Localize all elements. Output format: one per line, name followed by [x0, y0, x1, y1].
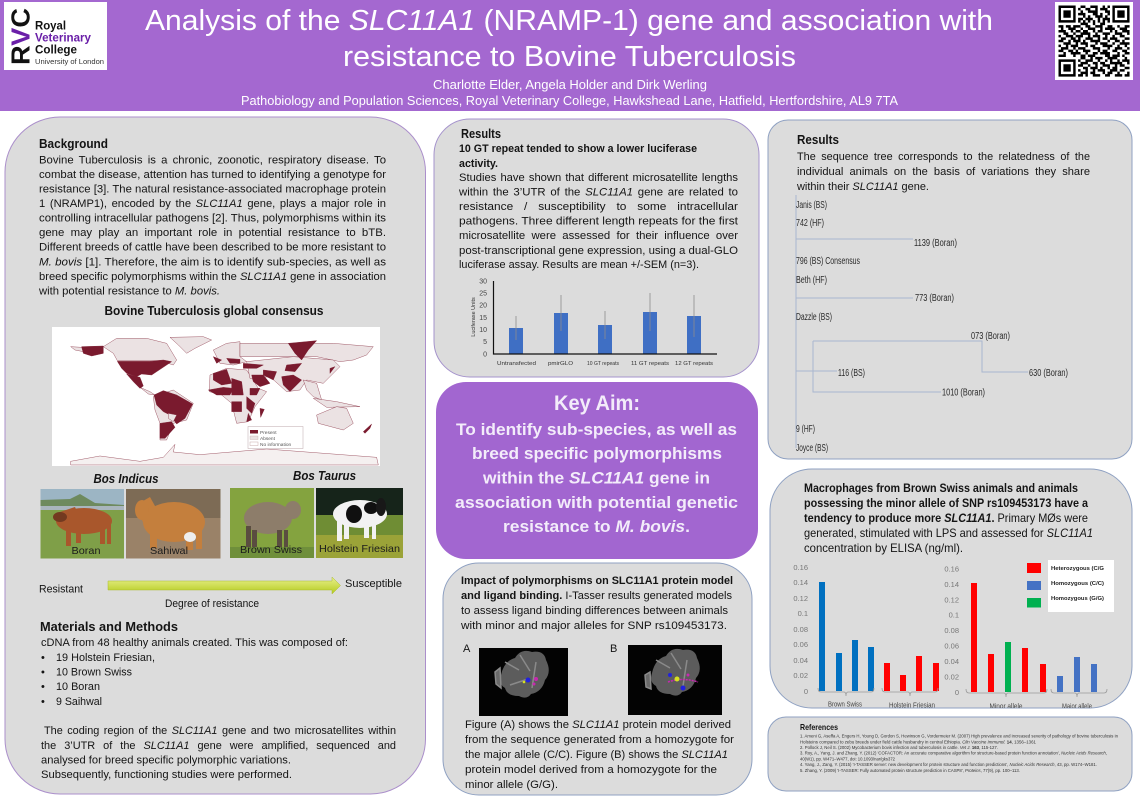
- title: resistance to Bovine Tuberculosis: [343, 41, 796, 73]
- photo: Boran: [40, 489, 124, 559]
- map legend: Absent: [260, 436, 276, 442]
- text block: methods: analysed for breed specific polymorphic variations.: [41, 754, 291, 766]
- photo captions: Brown Swiss: [240, 544, 302, 556]
- figure B: protein model, minor allele: [628, 645, 722, 715]
- subheading: luciferase finding: 10 GT repeat tended to show a lower luciferase: [459, 143, 697, 155]
- logo: Royal Veterinary College: College: [35, 44, 77, 56]
- panel: key aim: [436, 382, 758, 559]
- bar chart: by allele: 0.04: [944, 657, 959, 666]
- subheading: luciferase finding: [459, 143, 697, 170]
- text block: references list: 2. Pollock J, Neil S. (2002) Mycobacterium bovis infection and tuberculosis in cattle. Vet J. 163, 115-127.: [800, 745, 998, 751]
- bar chart: luciferase units: 10 GT repeats: [587, 361, 619, 367]
- text block: protein model intro: and ligand binding. I-Tasser results generated models: [461, 590, 732, 602]
- bar chart: by breed: 0: [804, 687, 808, 696]
- sequence tree: 796 (BS) Consensus: [796, 256, 860, 267]
- text block: tree description: individual animals on the basis of variations they share: [797, 166, 1090, 178]
- bar chart: by breed: Brown Swiss: [828, 700, 862, 708]
- affiliation: Pathobiology and Population Sciences, Royal Veterinary College, Hawkshead Lane, Hatfield, Hertfordshire, AL9 7TA: [241, 93, 898, 108]
- photo captions: Boran: [72, 545, 101, 557]
- bar chart: by allele: 0.08: [944, 626, 959, 635]
- heading: key aim: Key Aim:: [554, 392, 640, 415]
- text block: luciferase description: resistance / susceptibility to some intracellular: [459, 201, 738, 213]
- text block: key aim: To identify sub-species, as well as: [456, 420, 737, 439]
- bar chart: by allele: 0: [955, 688, 959, 697]
- text block: background: breed specific polymorphisms within the SLC11A1 gene in association: [39, 271, 386, 283]
- label: susceptible: Susceptible: [345, 578, 402, 590]
- text block: methods: [41, 725, 396, 781]
- text block: materials list: •: [41, 666, 45, 678]
- bar chart: luciferase units: 25: [479, 290, 487, 298]
- text block: materials list: 19 Holstein Friesian,: [56, 652, 155, 664]
- photo captions: Holstein Friesian: [319, 543, 400, 555]
- panel: macrophage results: [770, 469, 1132, 710]
- map legend: [248, 426, 303, 448]
- sequence tree: Beth (HF): [796, 275, 827, 286]
- text block: key aim: association with potential genetic: [455, 493, 738, 512]
- heading: Bos Taurus: Bos Taurus: [293, 469, 356, 483]
- bar chart: by breed: 0.14: [793, 578, 808, 587]
- heading: global consensus: Bovine Tuberculosis global consensus: [104, 304, 324, 318]
- text block: methods: The coding region of the SLC11A1 gene and two microsatellites within: [44, 725, 396, 737]
- bar chart: by breed: 0.12: [793, 594, 808, 603]
- sequence tree: 073 (Boran): [971, 331, 1010, 342]
- bar chart: by allele: 0.14: [944, 580, 959, 589]
- text block: figure caption: from the sequence generated from a homozygote for: [465, 734, 734, 746]
- sequence tree: Dazzle (BS): [796, 312, 832, 323]
- bar chart: by breed: 0.02: [793, 671, 808, 680]
- label: resistant: Resistant: [39, 584, 83, 596]
- text block: references list: 40(W1), pp. W471–W477, doi: 10.1093/nar/gks372: [800, 756, 895, 762]
- text block: macrophage results: concentration by ELISA (ng/ml).: [804, 541, 963, 555]
- text block: materials list: •: [41, 696, 45, 708]
- photo captions: [72, 543, 400, 557]
- subheading: luciferase finding: activity.: [459, 158, 498, 170]
- bar chart: by breed: 0.16: [793, 563, 808, 572]
- text block: key aim: breed specific polymorphisms: [472, 444, 722, 463]
- heading: background: Background: [39, 137, 108, 151]
- bar chart: luciferase units: Untransfected: [497, 361, 536, 367]
- logo: Royal Veterinary College: RVC: [6, 8, 36, 65]
- bar chart: luciferase units: Luciferase Units: [471, 297, 477, 337]
- panel: protein model: [443, 563, 752, 795]
- bar chart: by breed: 0.04: [793, 656, 808, 665]
- arrow: degree of resistance: [108, 577, 340, 594]
- sequence tree: 1139 (Boran): [914, 238, 957, 249]
- heading: references: References: [800, 722, 838, 732]
- map legend: No information: [260, 442, 292, 448]
- bar chart: by allele: 0.12: [944, 596, 959, 604]
- world map: [52, 327, 380, 466]
- sequence tree: 116 (BS): [838, 368, 865, 379]
- logo: Royal Veterinary College: Veterinary: [35, 32, 92, 44]
- text block: luciferase description: pathogens. Three different length repeats for the first: [459, 216, 738, 228]
- text block: materials list: 10 Boran: [56, 681, 100, 693]
- text block: figure caption: protein model derived from a homozygote for the: [465, 764, 717, 776]
- sequence tree: 742 (HF): [796, 218, 824, 229]
- bar chart: by allele: 0.16: [944, 564, 959, 574]
- text block: macrophage results: [804, 481, 1093, 555]
- text block: figure caption: minor allele (G/G).: [465, 779, 558, 791]
- text block: macrophage results: tendency to produce more SLC11A1. Primary MØs were: [804, 511, 1088, 525]
- heading: materials and methods: Materials and Methods: [40, 620, 178, 634]
- text block: materials list: •: [41, 681, 45, 693]
- figure A: protein model, major allele: [479, 648, 568, 716]
- sequence tree: 9 (HF): [796, 424, 815, 435]
- bar chart: by breed: 0.1: [798, 609, 808, 618]
- text block: figure caption: Figure (A) shows the SLC11A1 protein model derived: [465, 719, 731, 731]
- bar chart: luciferase units: 30: [479, 278, 487, 286]
- panel: references: [768, 717, 1132, 791]
- bar chart: luciferase units: 15: [479, 315, 487, 322]
- heading: Bos Indicus: Bos Indicus: [94, 472, 159, 486]
- bar chart: luciferase units: 10: [479, 327, 487, 334]
- logo: Royal Veterinary College: University of London: [35, 57, 104, 66]
- text block: protein model intro: [460, 575, 733, 632]
- text block: materials list: •: [41, 652, 45, 664]
- bar chart: by breed: [793, 563, 939, 710]
- text block: luciferase description: [458, 172, 739, 271]
- text block: references list: 5. Zhang, Y. (2009) 'I-TASSER: Fully automated protein structure prediction in CASP8', Proteins, 77(9), pp. 100–113.: [800, 768, 1020, 774]
- text block: key aim: within the SLC11A1 gene in: [482, 468, 710, 488]
- bar chart: luciferase units: 0: [483, 352, 487, 358]
- bar chart: by allele: [944, 564, 1107, 710]
- text block: background: controlling intracellular pathogens [2]. Thus, polymorphisms within its: [39, 212, 387, 224]
- text block: background: gene may play an important role in potential resistance to bTB.: [39, 227, 386, 239]
- sequence tree: 773 (Boran): [915, 293, 954, 304]
- bar chart: luciferase units: [471, 278, 717, 367]
- bar chart: by breed: 0.06: [793, 640, 808, 649]
- text block: references list: Holsteins compared to zebu breeds under field cattle husbandry in central Ethiopia. Clin Vaccine Immunol. 14, 1356–1361: [800, 739, 1036, 745]
- sequence tree: Joyce (BS): [796, 443, 828, 454]
- text block: protein model intro: to assess ligand binding differences between animals: [461, 605, 729, 617]
- text block: luciferase description: Studies have shown that different microsatellite lengths: [459, 172, 739, 184]
- chart legend: [1027, 560, 1114, 612]
- text block: methods: Subsequently, functioning studies were performed.: [41, 769, 292, 781]
- text block: background: with potential resistance to M. bovis.: [38, 286, 220, 298]
- text block: luciferase description: within the 3’UTR of the SLC11A1 gene are related to: [458, 186, 738, 198]
- panel: background and methods: [5, 117, 426, 794]
- bar chart: by breed: Holstein Friesian: [889, 700, 935, 710]
- text block: protein model intro: with minor and major alleles for SNP rs109453173.: [460, 620, 727, 632]
- header banner: [0, 0, 1140, 111]
- text block: macrophage results: possessing the minor allele of SNP rs109453173 have a: [804, 496, 1088, 510]
- photo captions: Sahiwal: [150, 545, 188, 557]
- text block: materials list: [41, 637, 348, 708]
- text block: references list: [800, 734, 1118, 774]
- bar chart: luciferase units: 5: [483, 339, 487, 346]
- text block: luciferase description: microsatellite were assessed for their influence over: [459, 230, 738, 242]
- bar chart: luciferase units: 20: [479, 302, 487, 310]
- bar chart: by allele: Major allele: [1062, 702, 1092, 710]
- bar chart: by allele: 0.1: [949, 610, 959, 620]
- text block: background: Different breeds of cattle have been described to be more resistant to: [39, 242, 386, 254]
- text block: background: resistance [3]. The natural resistance-associated macrophage protein: [39, 184, 386, 196]
- text block: luciferase description: post-transcriptional gene expression, using a dual-GLO: [459, 245, 738, 257]
- text block: figure caption: the major allele (C/C). Figure (B) shows the SLC11A1: [465, 749, 728, 761]
- text block: tree description: within their SLC11A1 gene.: [796, 181, 929, 193]
- text block: materials list: cDNA from 48 healthy animals created. This was composed of:: [41, 637, 348, 649]
- title: [145, 5, 993, 73]
- text block: macrophage results: Macrophages from Brown Swiss animals and animals: [804, 481, 1078, 495]
- panel: sequence tree results: [768, 120, 1132, 459]
- heading: results: Results: [797, 133, 839, 147]
- label: figure B: B: [610, 643, 617, 655]
- text block: methods: the 3’UTR of the SLC11A1 gene were amplified, sequenced and: [41, 740, 396, 752]
- sequence tree: 630 (Boran): [1029, 368, 1068, 379]
- sequence tree: 1010 (Boran): [942, 388, 985, 398]
- chart legend: Homozygous (C/C): [1051, 581, 1104, 587]
- text block: background: Bovine Tuberculosis is a chronic, zoonotic, respiratory disease. To: [39, 154, 386, 166]
- authors: Charlotte Elder, Angela Holder and Dirk Werling: [433, 77, 707, 92]
- text block: key aim: [455, 420, 738, 536]
- bar chart: luciferase units: pmirGLO: [548, 361, 574, 367]
- heading: results: Results: [461, 127, 501, 141]
- bar chart: by allele: 0.02: [944, 672, 959, 682]
- bar chart: by allele: Minor allele: [990, 702, 1022, 710]
- photo: Sahiwal: [126, 489, 220, 559]
- sequence tree: Janis (BS): [796, 200, 827, 211]
- map legend: Present: [260, 430, 277, 436]
- text block: tree description: The sequence tree corresponds to the relatedness of the: [797, 151, 1090, 163]
- text block: protein model intro: Impact of polymorphisms on SLC11A1 protein model: [461, 575, 733, 587]
- photo: Holstein Friesian: [316, 488, 403, 558]
- text block: references list: 4. Yang, J., Zang, Y. (2015) 'I-TASSER server: new development for protein structure and function predictions', Nucleic Acids Research, 43, pp. W174–W181.: [800, 762, 1097, 768]
- label: figure A: A: [463, 643, 471, 655]
- text block: background: M. bovis [1]. Therefore, the aim is to identify sub-species, as well as: [39, 256, 387, 268]
- text block: materials list: 9 Saihwal: [56, 696, 102, 708]
- panel: luciferase results: [434, 119, 759, 377]
- text block: macrophage results: generated, stimulated with LPS and assessed for SLC11A1: [804, 526, 1093, 540]
- text block: references list: 3. Roy, A., Yang, J. and Zhang, Y. (2012) 'COFACTOR: An accurate comparative algorithm for structure-based protein function annotation', Nucleic Acids Research,: [800, 751, 1107, 757]
- text block: tree description: [796, 151, 1090, 193]
- label: degree of resistance: Degree of resistance: [165, 598, 259, 610]
- chart legend: Heterozygous (C/G: [1051, 566, 1104, 572]
- logo: Royal Veterinary College: Royal: [35, 20, 66, 32]
- text block: background: combat the disease, attention has turned to identifying a genotype for: [39, 169, 386, 181]
- title: Analysis of the SLC11A1 (NRAMP-1) gene and association with: [145, 5, 993, 37]
- photo: Brown Swiss: [230, 488, 314, 558]
- QR code: [1055, 2, 1133, 80]
- bar chart: by breed: 0.08: [793, 625, 808, 634]
- text block: key aim: resistance to M. bovis.: [503, 517, 690, 536]
- text block: luciferase description: luciferase assay. Results are mean +/-SEM (n=3).: [459, 259, 699, 271]
- text block: background: 1 (NRAMP1), encoded by the SLC11A1 gene, plays a major role in: [39, 198, 386, 210]
- sequence tree: [796, 195, 1068, 454]
- bar chart: by allele: 0.06: [944, 642, 959, 650]
- chart legend: Homozygous (G/G): [1051, 596, 1104, 602]
- bar chart: luciferase units: 11 GT repeats: [631, 361, 669, 367]
- text block: materials list: 10 Brown Swiss: [56, 666, 132, 678]
- logo: Royal Veterinary College: [4, 2, 107, 70]
- bar chart: luciferase units: 12 GT repeats: [675, 361, 713, 367]
- text block: figure caption: [465, 719, 734, 791]
- text block: background: [38, 154, 387, 298]
